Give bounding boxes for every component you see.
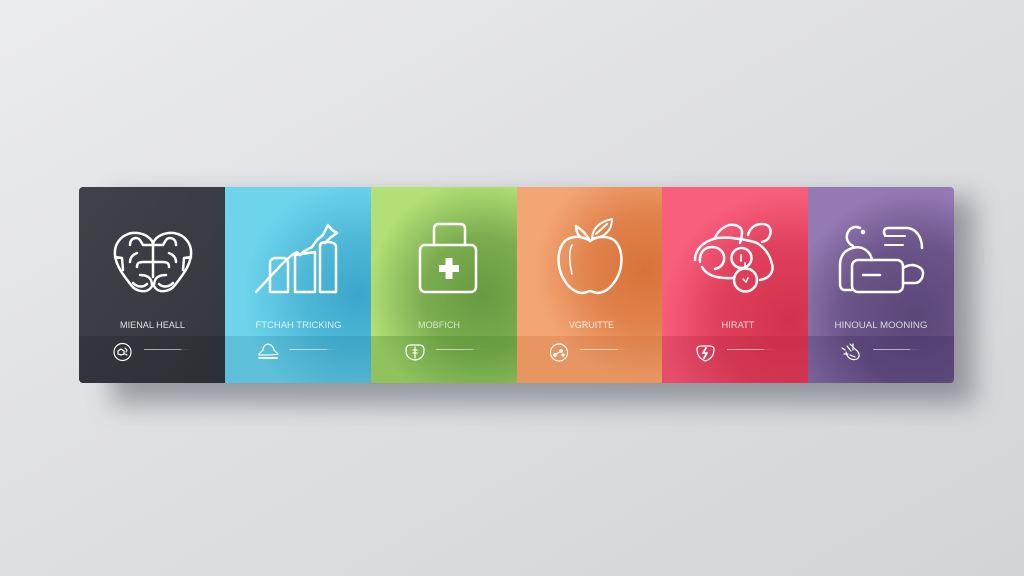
divider line [436, 349, 486, 350]
label: VGRUITTE [569, 320, 614, 331]
panel strip shadow [112, 198, 974, 404]
label: HINOUAL MOONING [834, 320, 928, 331]
divider line [727, 349, 777, 350]
icon: node badge [550, 344, 568, 361]
icon: brain [115, 233, 191, 291]
panel: tracking [225, 187, 371, 383]
icon: shield badge [406, 345, 424, 360]
divider line [580, 349, 631, 350]
icon: hand badge [842, 344, 859, 360]
icon: cloud badge [259, 344, 278, 358]
divider line [289, 349, 341, 350]
panel: medical kit [371, 187, 517, 383]
icon: person and device [840, 227, 923, 292]
label: FTCHAH TRICKING [256, 320, 342, 331]
icon: tangled heart [695, 224, 772, 292]
label: MIENAL HEALL [120, 320, 185, 331]
divider line [144, 349, 194, 350]
label: HIRATT [722, 320, 755, 331]
panel: nutrition [517, 187, 663, 383]
icon: rising bar chart [256, 225, 337, 292]
panel: mental health [79, 187, 225, 383]
icon: apple [559, 219, 621, 293]
panel: heart [662, 187, 808, 383]
label: MOBFICH [418, 320, 460, 331]
icon: heart badge [697, 346, 714, 361]
divider line [873, 349, 923, 350]
panel: mooning [808, 187, 954, 383]
icon: medical kit [420, 224, 476, 292]
icon: small badge [114, 344, 131, 360]
